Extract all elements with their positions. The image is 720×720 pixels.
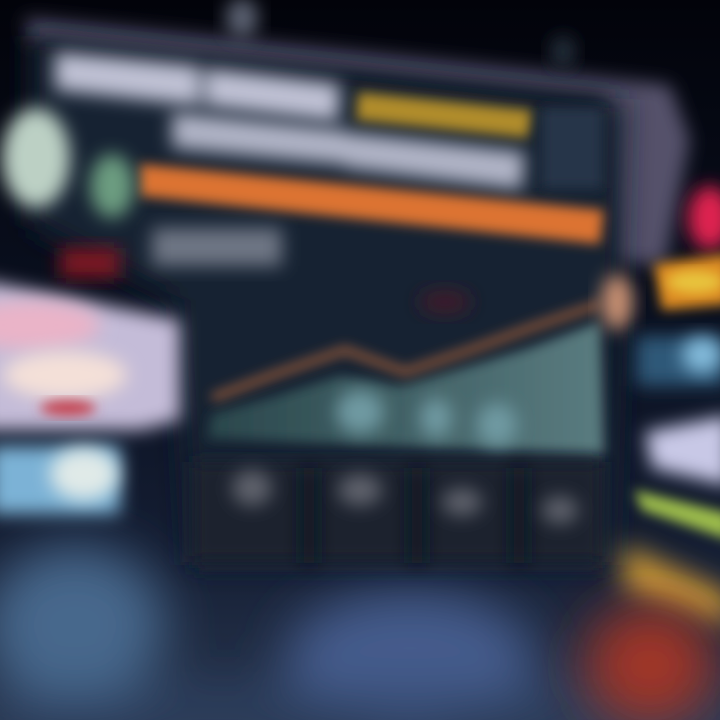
- top icon right: [551, 36, 575, 68]
- faint red marker: [419, 290, 471, 314]
- yellow strip core: [667, 271, 720, 293]
- pastel panel: [0, 280, 180, 430]
- yellow glow: [622, 545, 720, 625]
- floor reflections: [0, 545, 720, 720]
- board frame: [25, 18, 690, 265]
- pastel panel red mark: [40, 400, 96, 416]
- green bar: [634, 490, 720, 540]
- subtitle: [152, 228, 282, 266]
- red pink badge: [688, 186, 720, 250]
- area chart: [208, 304, 604, 455]
- blue strip: [636, 336, 720, 386]
- dark inset square: [542, 108, 602, 188]
- column block: [192, 462, 602, 562]
- orange yellow strip: [654, 254, 720, 310]
- title line one: [55, 52, 340, 122]
- pastel panel text: [3, 351, 127, 399]
- top ornaments: [226, 0, 575, 68]
- chart trend line: [212, 304, 600, 398]
- title line two: [172, 112, 525, 190]
- board surface: [30, 35, 625, 565]
- column labels: [232, 470, 578, 524]
- orange banner: [140, 164, 604, 244]
- chart area: [208, 322, 604, 455]
- left panels: [0, 108, 180, 514]
- top icon: green: [90, 154, 134, 218]
- main board panel: [25, 18, 690, 565]
- top icon: white leaf: [2, 108, 70, 208]
- chart highlights: [336, 390, 517, 447]
- light blue strip core: [682, 337, 720, 373]
- lower card highlight: [50, 448, 118, 500]
- peach blob: [601, 274, 633, 330]
- red tag: [60, 248, 120, 278]
- pastel panel top tint: [0, 301, 100, 349]
- right panels: [585, 186, 720, 720]
- red glow: [585, 605, 715, 720]
- column dividers: [302, 468, 526, 563]
- lavender white card: [645, 415, 720, 486]
- top icon left: [226, 0, 258, 38]
- lower blue card: [0, 446, 120, 514]
- title highlight word: [356, 92, 532, 138]
- bottom stat columns: [192, 462, 602, 563]
